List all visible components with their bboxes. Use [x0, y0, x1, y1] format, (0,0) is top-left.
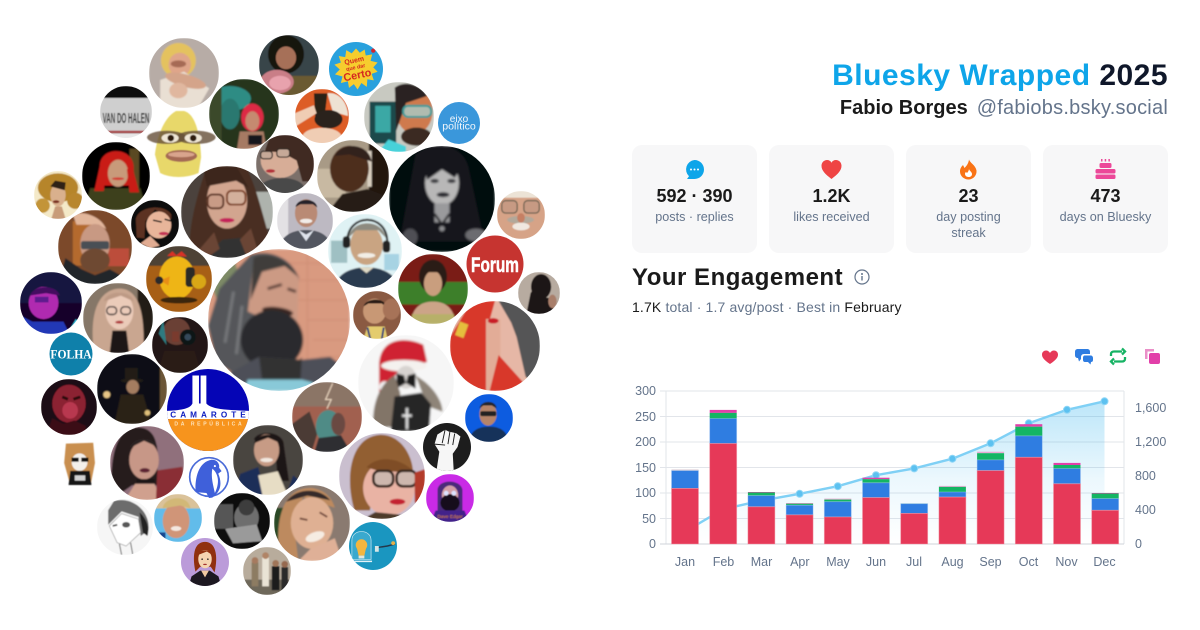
avatar: raised fist [423, 423, 471, 471]
avatar: woman with red glasses [339, 433, 425, 519]
stat card: day posting streak [906, 145, 1031, 253]
avatar: man with headphones [328, 214, 402, 288]
avatar: cartoon redhead on lilac [181, 538, 229, 586]
cumulative points [758, 398, 1108, 504]
icon: chat bubble [686, 160, 704, 179]
avatar: woman with choker [110, 426, 184, 500]
stat card: posts and replies: 592 · 390 [656, 186, 733, 206]
avatar: man on blue background [465, 394, 513, 442]
avatar: woman with brown glasses [181, 166, 273, 258]
replies bars [672, 418, 1119, 517]
avatar: band photo [243, 547, 291, 595]
avatar: Folha logo: FOLHA [50, 348, 92, 362]
icon: flame [960, 160, 976, 180]
avatar: yellow chick toy [146, 246, 212, 312]
avatar: eixo politico logo: eixo [450, 113, 468, 125]
avatar: person with camera [152, 317, 208, 373]
avatar: purple bearded character: Dave Edgar [437, 514, 463, 520]
avatar: orange poster [295, 89, 349, 145]
avatar cluster: VAN DO HALEN [103, 111, 149, 127]
avatar: man in top hat [97, 354, 167, 424]
avatar: Camarote da Republica logo: DA REPÚBLICA [174, 421, 242, 428]
icon: quotes legend [1145, 349, 1154, 359]
engagement summary: 1.7K total · 1.7 avg/post · Best in February [632, 299, 902, 315]
stat card: likes received: likes received [793, 210, 870, 224]
avatar: lightbulb birdcage [349, 522, 397, 570]
avatar: woman in navy blazer [233, 425, 303, 495]
avatar: red hair illustration [82, 142, 150, 210]
engagement chart [635, 384, 1166, 569]
avatar: blond man selfie [154, 494, 202, 542]
right axis labels: 0 [1135, 537, 1142, 551]
chart legend icons [1042, 348, 1160, 366]
avatar: purple bearded character [426, 474, 474, 522]
right axis labels [1135, 401, 1166, 551]
right axis labels: 1,600 [1135, 401, 1166, 415]
avatar: man in suit [277, 193, 333, 249]
avatar cluster [20, 35, 560, 595]
avatar: person with pink sweets [259, 35, 319, 96]
heading: your engagement: Your Engagement [632, 264, 843, 291]
icon: heart legend [1042, 350, 1058, 364]
stat card: posts and replies [632, 145, 757, 253]
month labels: Dec [1093, 555, 1116, 569]
cumulative line [685, 401, 1104, 532]
right axis labels: 400 [1135, 503, 1156, 517]
avatar: child in yellow shirt [353, 291, 401, 339]
avatar: red hair mermaid [209, 79, 279, 149]
stat card: day posting streak: day posting [936, 210, 1001, 224]
avatar: smiling woman [274, 485, 350, 561]
month labels: Oct [1019, 555, 1039, 569]
stat card: days on Bluesky: 473 [1090, 186, 1121, 206]
avatar: manga sketch [97, 499, 153, 555]
left axis labels: 0 [649, 537, 656, 551]
right axis labels: 1,200 [1135, 435, 1166, 449]
avatar: Amelie style poster [398, 254, 468, 324]
icon: heart [822, 160, 842, 179]
icon: info [854, 269, 870, 285]
avatar: blonde person [149, 38, 219, 108]
avatar: comic woman [131, 200, 179, 248]
month labels: Apr [790, 555, 810, 569]
avatar: main user portrait [208, 249, 350, 391]
month labels: Nov [1055, 555, 1078, 569]
avatar: neon lit person [20, 272, 82, 334]
avatar: illustrated woman in red [450, 301, 540, 391]
month labels: Jun [866, 555, 886, 569]
stat card: days on Bluesky [1043, 145, 1168, 253]
avatar: penguin logo [188, 456, 230, 500]
quotes bars [672, 410, 1119, 504]
reposts bars [710, 413, 1119, 505]
avatar: teal haired figure with lightning [292, 382, 362, 452]
avatar: sunburst logo [329, 42, 383, 96]
avatar: Folha logo [50, 332, 92, 376]
avatar: older man with glasses [497, 191, 545, 239]
avatar: Camarote da Republica logo [167, 369, 249, 452]
stat card: day posting streak: 23 [958, 186, 979, 206]
avatar: yellow banana with eyes [147, 111, 216, 177]
left axis labels: 150 [635, 461, 656, 475]
avatar: Forum logo [466, 236, 524, 292]
avatar: eixo politico logo [438, 102, 480, 144]
avatar: woman with glasses and scarf [256, 135, 314, 199]
month labels: Jan [675, 555, 695, 569]
stat card: posts and replies: posts · replies [655, 210, 734, 224]
stat card: days on Bluesky: days on Bluesky [1060, 210, 1151, 224]
month labels: Aug [941, 555, 964, 569]
avatar: golden curls illustration [34, 171, 83, 219]
month labels: Jul [906, 555, 922, 569]
left axis labels: 100 [635, 486, 656, 500]
user name and handle: Fabio Borges @fabiobs.bsky.social [840, 97, 1168, 119]
avatar: eixo politico logo: político [442, 120, 476, 132]
avatar: Camarote da Republica logo: CAMAROTE [170, 410, 246, 419]
avatar: sunburst logo: que dar [346, 63, 367, 73]
cumulative area [685, 401, 1104, 544]
avatar: man in shadow [317, 140, 389, 212]
title: Bluesky Wrapped 2025 [832, 59, 1168, 92]
likes bars [672, 444, 1119, 544]
avatar: bald bearded man [58, 210, 132, 284]
month labels: May [826, 555, 851, 569]
left axis labels: 200 [635, 435, 656, 449]
icon: birthday cake [1096, 159, 1116, 179]
left axis labels: 250 [635, 410, 656, 424]
avatar: sunburst logo: Certo [342, 67, 373, 84]
month labels: Mar [751, 555, 772, 569]
avatar: sunburst logo: Quem [344, 56, 365, 67]
avatar: dark haired woman [518, 272, 560, 314]
stat card: likes received [769, 145, 894, 253]
avatar: blonde with round glasses [83, 283, 153, 353]
avatar: black and white library [214, 493, 270, 549]
avatar: santa hat black metal [358, 335, 454, 431]
avatar: goth woman [389, 145, 495, 252]
stat card: day posting streak: streak [951, 226, 986, 240]
avatar: Van do Halen sign [100, 86, 152, 139]
month labels: Sep [979, 555, 1002, 569]
icon: reposts legend [1111, 348, 1125, 364]
avatar: doodle with sunglasses [64, 443, 95, 485]
month labels [675, 555, 1116, 569]
left axis labels: 300 [635, 384, 656, 398]
left axis labels [635, 384, 656, 551]
stat card: likes received: 1.2K [812, 186, 851, 206]
icon: replies legend [1075, 349, 1093, 364]
right axis labels: 800 [1135, 469, 1156, 483]
avatar: Forum logo: Forum [471, 252, 519, 277]
avatar: red vampire [41, 379, 97, 435]
avatar: man with teal glasses [364, 82, 434, 152]
month labels: Feb [713, 555, 734, 569]
left axis labels: 50 [642, 512, 656, 526]
